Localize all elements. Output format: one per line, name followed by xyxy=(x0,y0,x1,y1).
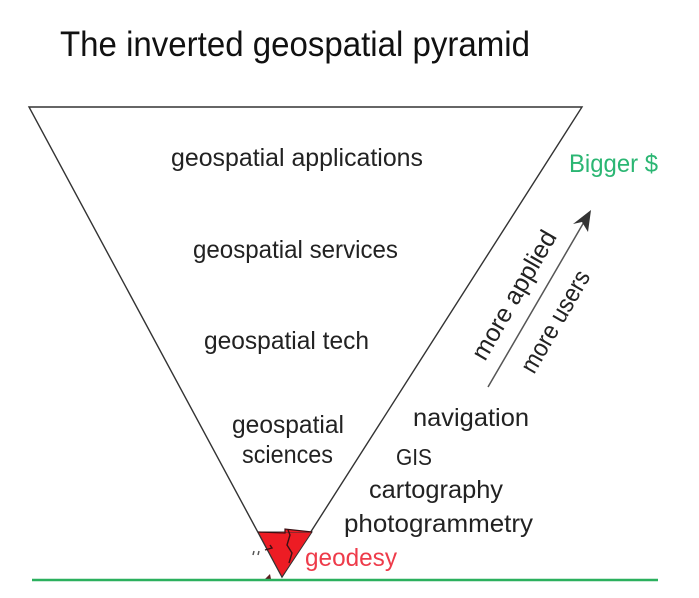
geospatial sciences list xyxy=(344,404,534,538)
tier: geospatial sciences: geospatial xyxy=(232,411,344,439)
title: The inverted geospatial pyramid xyxy=(60,25,530,64)
inverted pyramid outline xyxy=(29,107,582,577)
geodesy red triangle xyxy=(258,529,312,577)
arrow: upward trend xyxy=(488,210,591,387)
geospatial sciences list: cartography xyxy=(369,476,503,504)
tier: geospatial tech: geospatial tech xyxy=(204,327,369,355)
more applied label: more applied xyxy=(466,225,563,365)
more users label: more users xyxy=(515,265,596,378)
tier: geospatial sciences: sciences xyxy=(242,441,333,469)
geodesy label: geodesy xyxy=(305,544,397,572)
tier: geospatial services: geospatial services xyxy=(193,236,398,264)
pyramid tiers xyxy=(171,144,423,469)
small marks xyxy=(253,551,271,579)
bigger dollars label: Bigger $ xyxy=(569,150,658,178)
geospatial sciences list: GIS xyxy=(396,444,432,470)
tier: geospatial sciences xyxy=(232,411,344,469)
geospatial sciences list: navigation xyxy=(413,404,529,432)
tier: geospatial applications: geospatial applications xyxy=(171,144,423,172)
green baseline xyxy=(32,579,658,581)
geospatial sciences list: photogrammetry xyxy=(344,510,534,538)
